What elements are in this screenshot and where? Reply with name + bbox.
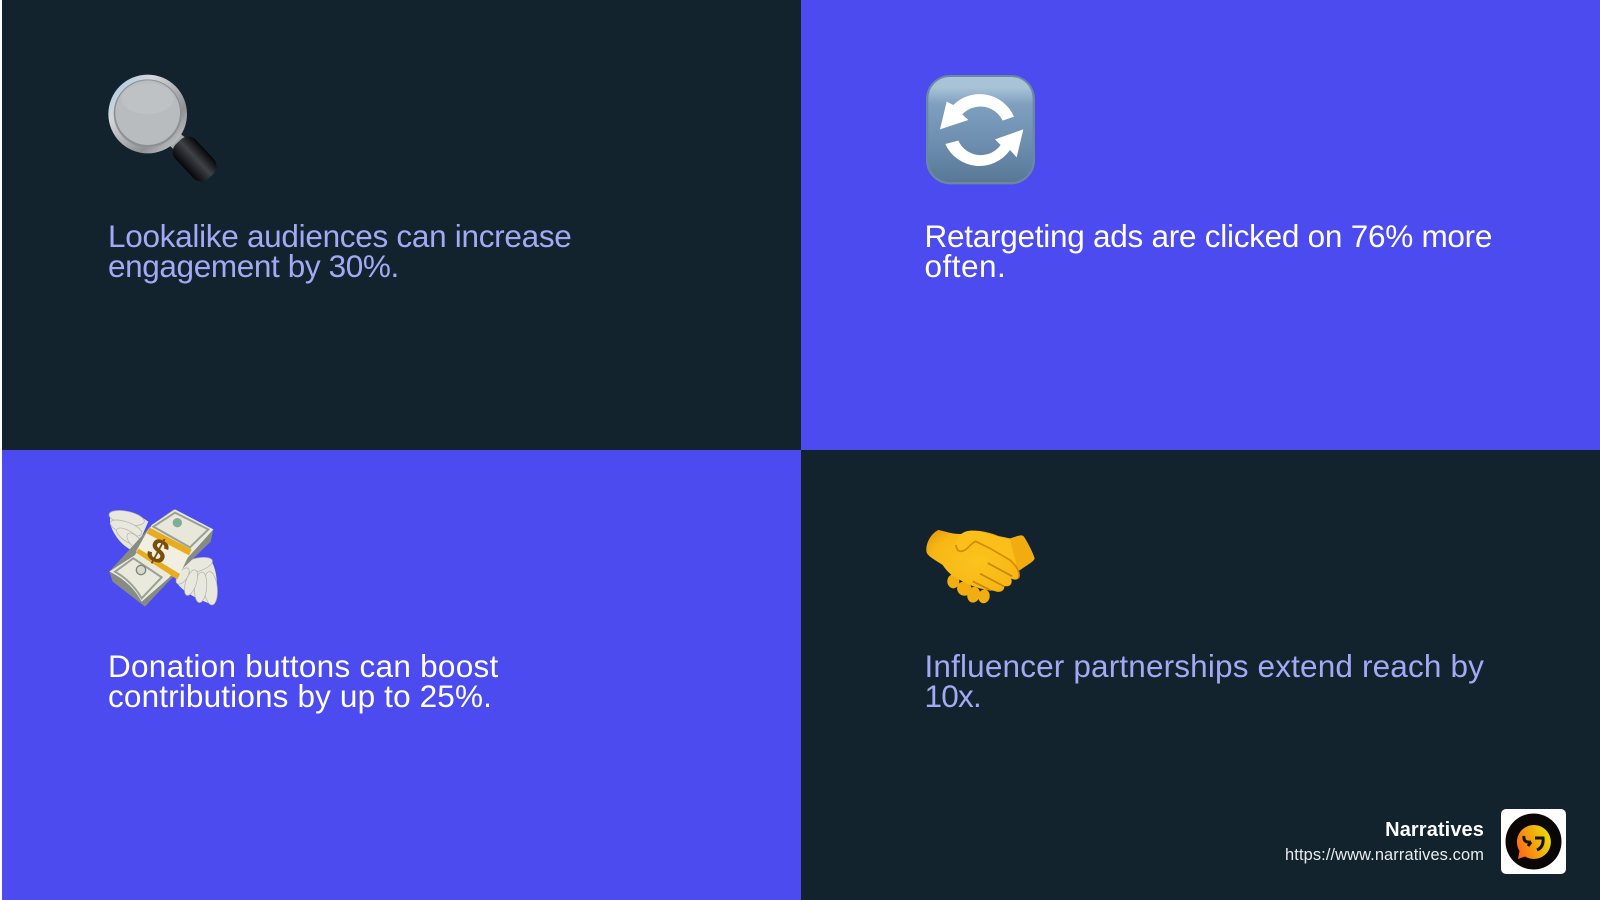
text: donation statistic: Donation buttons can boost — [108, 648, 499, 684]
text: influencer statistic — [924, 648, 1484, 714]
text: influencer statistic: 10x. — [924, 678, 981, 714]
brand url: https://www.narratives.com — [1285, 846, 1484, 864]
icon: refresh arrows — [926, 75, 1035, 184]
text: retargeting statistic: Retargeting ads are clicked on 76% more — [924, 218, 1492, 254]
icon: magnifying glass — [108, 74, 216, 182]
logo badge — [1501, 809, 1566, 874]
panel: retargeting ads — [801, 0, 1600, 450]
panel: lookalike audiences — [2, 0, 801, 450]
text: lookalike statistic: Lookalike audiences can increase — [108, 218, 572, 254]
text: lookalike statistic: engagement by 30%. — [108, 248, 399, 284]
footer: brand name and url — [1285, 819, 1484, 864]
icon: handshake — [926, 530, 1035, 604]
panel: donation buttons — [2, 450, 801, 900]
text: lookalike statistic — [108, 218, 572, 284]
text: influencer statistic: Influencer partnerships extend reach by — [924, 648, 1484, 684]
text: donation statistic: contributions by up to 25%. — [108, 678, 492, 714]
text: retargeting statistic: often. — [924, 248, 1006, 284]
text: retargeting statistic — [924, 218, 1492, 284]
icon: money with wings: $ — [141, 530, 175, 573]
brand name: Narratives — [1385, 819, 1484, 841]
panel: influencer partnerships — [801, 450, 1600, 900]
text: donation statistic — [108, 648, 499, 714]
icon: money with wings — [108, 509, 218, 606]
